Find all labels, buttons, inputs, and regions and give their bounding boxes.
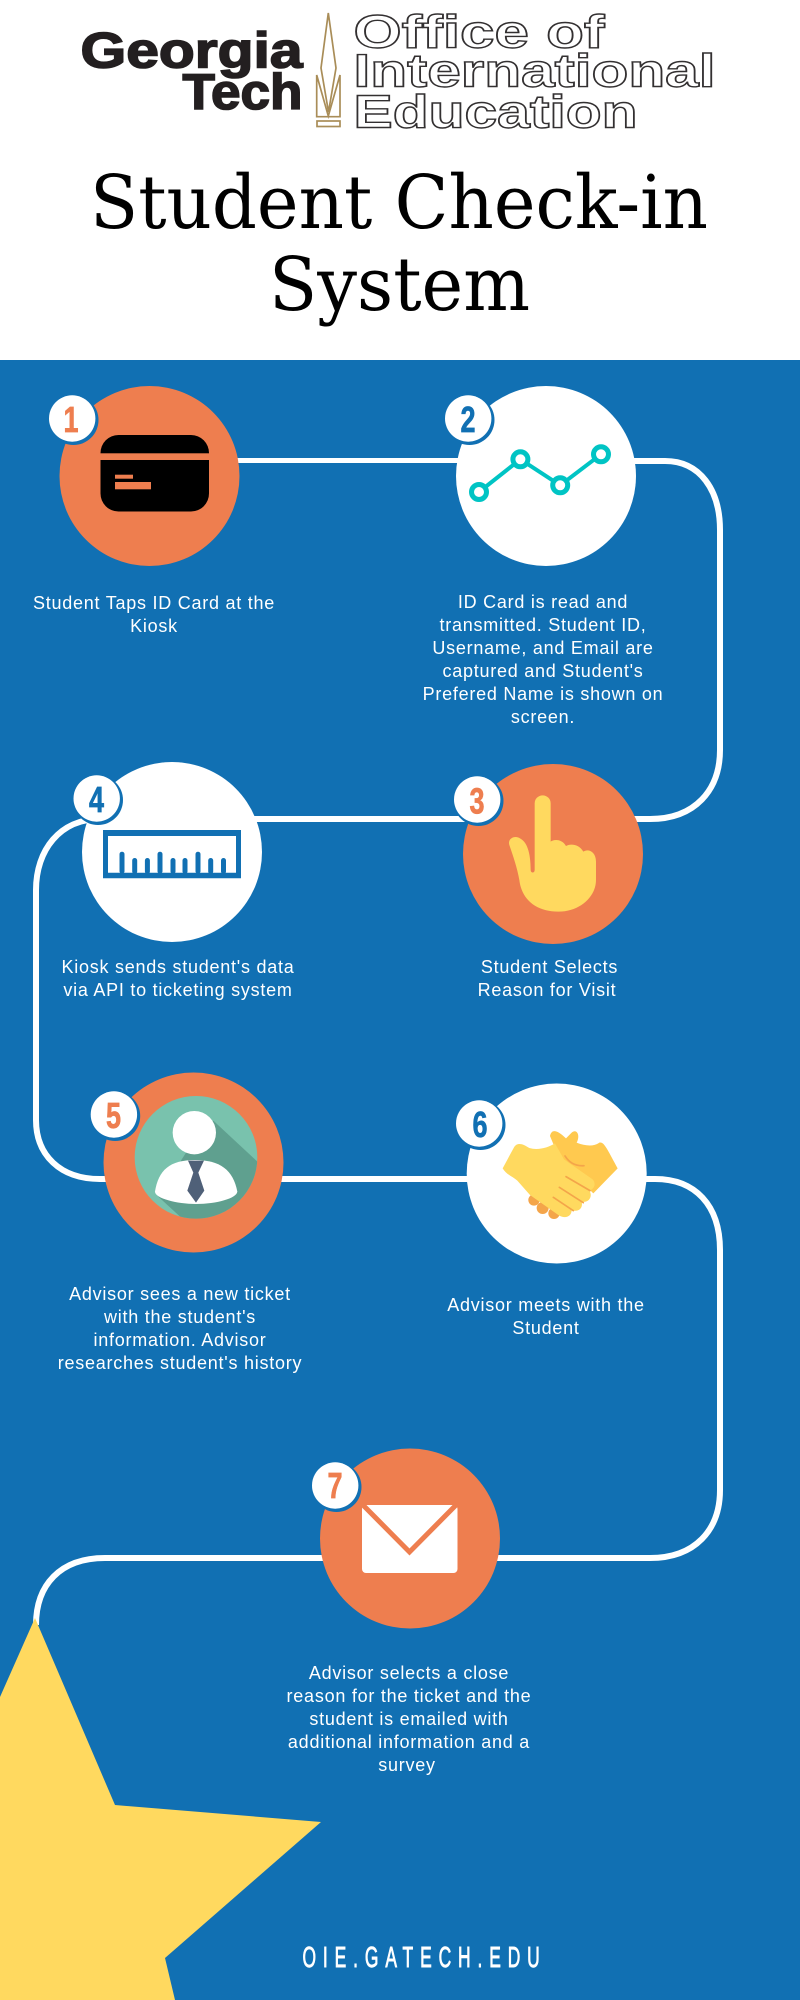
icon: handshake: [503, 1131, 618, 1219]
step 4: [61, 762, 295, 1000]
logo wordmark: Georgia Tech: Georgia: [80, 22, 304, 78]
step 3 circle: [463, 764, 643, 944]
badge 5: [90, 1091, 140, 1141]
icon: envelope: [358, 1500, 459, 1573]
badge 2: [444, 395, 494, 445]
step 2 text: [423, 592, 663, 727]
step 1 text: [33, 593, 275, 636]
badge 3: [454, 776, 504, 826]
step 1 text: Kiosk: [130, 616, 178, 636]
step 4 text: [61, 957, 295, 1000]
step 7 text: Advisor selects a close: [309, 1663, 509, 1683]
step 5 text: [58, 1284, 302, 1373]
icon: pointing hand: [509, 795, 596, 912]
logo wordmark: Office of International Education: International: [354, 45, 716, 97]
logo wordmark: Office of International Education: Office of: [354, 5, 605, 57]
step 2 text: captured and Student's: [442, 661, 644, 681]
badge 7: 7: [327, 1465, 343, 1506]
step 1 circle: [60, 386, 240, 566]
step 5 circle: [104, 1072, 284, 1252]
step 7 circle: [320, 1448, 500, 1628]
step 4 text: via API to ticketing system: [63, 980, 293, 1000]
logo icon: gold spire: [317, 13, 340, 126]
step 6 circle: [467, 1084, 647, 1264]
step 7 text: reason for the ticket and the: [287, 1686, 531, 1706]
step 6 text: [447, 1295, 645, 1338]
step 4 circle: [82, 762, 262, 942]
badge 1: 1: [63, 399, 79, 440]
step 7 text: student is emailed with: [309, 1709, 509, 1729]
step 2 text: screen.: [511, 707, 575, 727]
badge 1: [48, 395, 98, 445]
badge 5: 5: [106, 1095, 121, 1136]
star: [0, 1618, 321, 2000]
step 3 text: Reason for Visit: [478, 980, 616, 1000]
title: [90, 160, 708, 328]
step 4 text: Kiosk sends student's data: [61, 957, 295, 977]
icon: line graph: [472, 447, 608, 500]
step 2 text: Prefered Name is shown on: [423, 684, 663, 704]
connector path: [36, 460, 720, 1625]
logo wordmark: Office of International Education: Education: [354, 86, 638, 138]
step 2 text: transmitted. Student ID,: [439, 615, 647, 635]
step 5 text: researches student's history: [58, 1353, 302, 1373]
badge 4: 4: [89, 779, 104, 820]
icon: advisor with tie: [134, 1096, 258, 1219]
step 3 text: [478, 957, 618, 1000]
step 7 text: survey: [378, 1755, 436, 1775]
step 5 text: Advisor sees a new ticket: [69, 1284, 291, 1304]
step 1: [33, 386, 275, 636]
badge 4: [73, 775, 123, 825]
title: System: [269, 242, 530, 328]
logo: Georgia Tech Office of International Education: [80, 5, 716, 137]
icon: ruler: [103, 830, 241, 878]
badge 3: 3: [469, 781, 485, 821]
step 6 text: Student: [512, 1318, 580, 1338]
step 2 text: Username, and Email are: [432, 638, 654, 658]
badge 2: 2: [460, 399, 476, 440]
title: Student Check-in: [90, 160, 708, 246]
icon: ID card: [100, 435, 209, 512]
step 3: [454, 764, 643, 1000]
step 1 text: Student Taps ID Card at the: [33, 593, 275, 613]
step 5 text: information. Advisor: [93, 1330, 267, 1350]
step 2 circle: [456, 386, 636, 566]
logo wordmark: Georgia Tech: [80, 22, 304, 120]
step 2 text: ID Card is read and: [458, 592, 628, 612]
step 2: [423, 386, 663, 727]
badge 7: [312, 1462, 362, 1512]
step 3 text: Student Selects: [481, 957, 618, 977]
logo wordmark: Georgia Tech: Tech: [182, 64, 302, 120]
step 7: [287, 1448, 531, 1775]
step 5: [58, 1072, 302, 1373]
logo wordmark: Office of International Education: [354, 5, 716, 137]
badge 6: 6: [472, 1104, 488, 1145]
step 6: [447, 1084, 647, 1338]
step 5 text: with the student's: [103, 1307, 256, 1327]
step 6 text: Advisor meets with the: [447, 1295, 645, 1315]
badge 6: [456, 1100, 506, 1150]
step 7 text: [287, 1663, 531, 1775]
step 7 text: additional information and a: [288, 1732, 530, 1752]
footer URL: OIE.GATECH.EDU: [302, 1942, 547, 1974]
